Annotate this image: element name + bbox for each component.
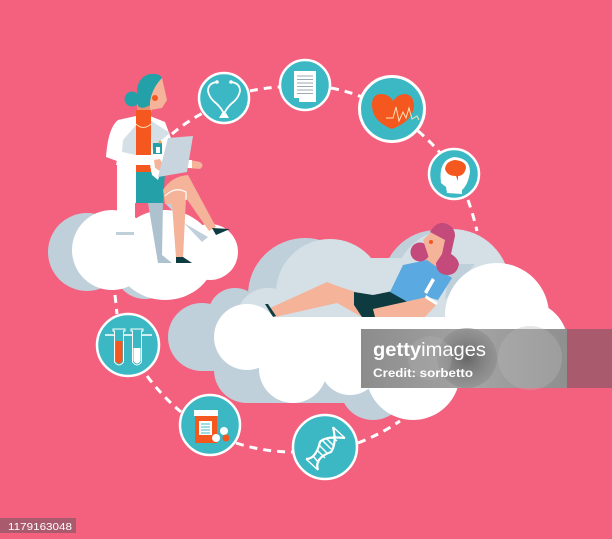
patient figure — [265, 223, 459, 317]
coat hem — [116, 232, 134, 235]
badge — [153, 140, 162, 154]
dashed ring connecting icons — [115, 87, 477, 452]
icon: heart — [360, 76, 424, 142]
coat lapels — [122, 120, 170, 155]
main cloud back layer — [168, 229, 510, 420]
hair — [430, 223, 459, 275]
crossed leg — [163, 175, 216, 258]
leg — [270, 282, 362, 317]
neck — [425, 250, 442, 270]
coat — [106, 116, 171, 234]
tablet — [158, 136, 193, 177]
doctor figure — [106, 74, 230, 263]
shoe — [265, 304, 276, 317]
cheek — [152, 95, 158, 101]
icon: test tubes — [97, 314, 159, 376]
sleeve with arm — [116, 155, 163, 180]
neck — [137, 104, 152, 112]
image id tag: 1179163048 — [8, 521, 72, 533]
sleeve — [424, 278, 438, 305]
image id tag — [0, 518, 76, 533]
watermark credit: Credit: sorbetto — [373, 368, 473, 380]
sweater — [136, 110, 151, 172]
knee sock line — [165, 190, 186, 200]
skirt — [136, 172, 165, 203]
hand and forearm — [188, 160, 202, 169]
shorts — [354, 290, 415, 317]
main cloud front layer — [214, 263, 568, 420]
back leg — [148, 203, 172, 263]
icon: brain in head — [429, 149, 479, 199]
left cloud — [48, 210, 238, 300]
icon: pill bottle — [180, 395, 240, 455]
hair lumps — [410, 242, 430, 262]
far leg — [165, 203, 208, 242]
face — [423, 233, 446, 262]
shoes — [176, 228, 230, 263]
face — [150, 78, 167, 110]
watermark logo: gettyimages — [373, 339, 486, 361]
hair — [137, 74, 162, 108]
cheek — [429, 240, 433, 244]
lanyard — [136, 124, 151, 128]
icon: DNA helix — [293, 415, 357, 479]
arm — [373, 297, 438, 317]
watermark panel — [361, 326, 612, 390]
hair bun — [124, 92, 140, 106]
icon: document — [280, 60, 330, 110]
icon: stethoscope — [199, 73, 249, 123]
shirt — [390, 260, 452, 305]
